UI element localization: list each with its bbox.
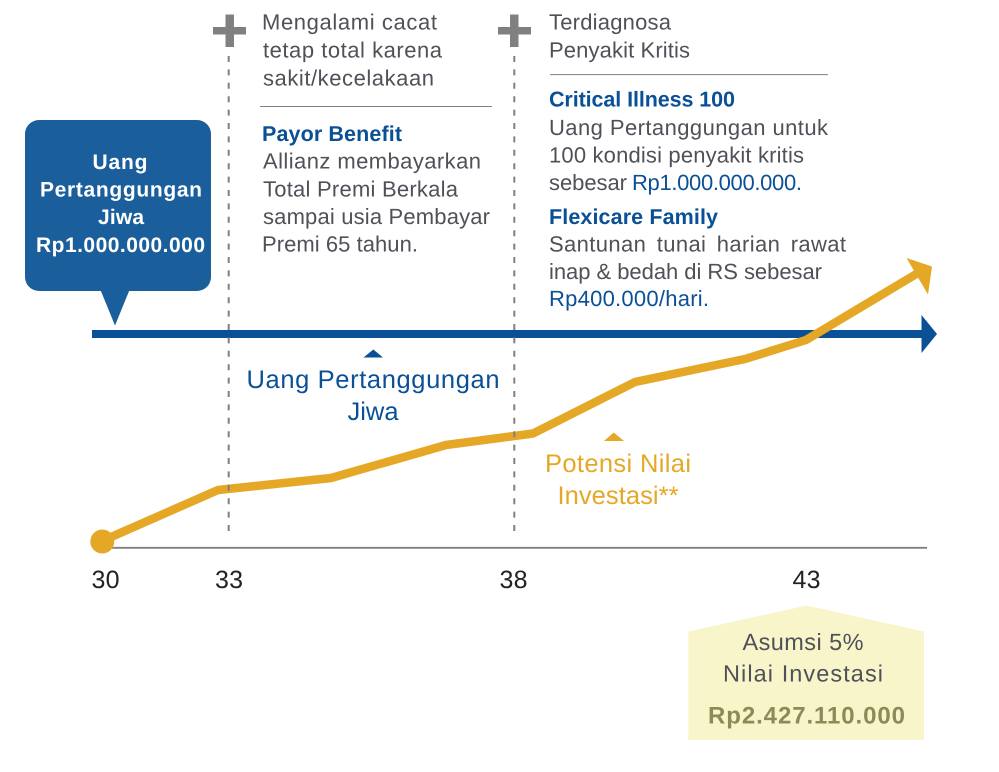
callout: sum assured bubble: Rp1.000.000.000 (36, 234, 205, 257)
callout: sum assured bubble (25, 120, 211, 326)
critical illness text: Critical Illness 100 (549, 88, 735, 112)
blue series label (246, 366, 500, 426)
critical illness text: Uang Pertanggungan untuk (549, 115, 829, 140)
small gold pointer (604, 432, 624, 441)
divider left (260, 106, 492, 108)
payor benefit text (262, 122, 490, 256)
dashed marker lines (229, 56, 514, 533)
callout: sum assured bubble: Jiwa (98, 206, 144, 229)
left event text: sakit/kecelakaan (263, 66, 434, 90)
divider right (550, 74, 828, 76)
callout: sum assured bubble: Pertanggungan (40, 178, 202, 202)
payor benefit text: Total Premi Berkala (263, 176, 459, 202)
callout: yellow house: Nilai Investasi (723, 660, 883, 686)
critical illness text: Rp1.000.000.000. (632, 170, 802, 195)
callout: yellow house: Rp2.427.110.000 (708, 702, 905, 730)
payor benefit text: Allianz membayarkan (263, 148, 481, 174)
age labels (92, 566, 820, 594)
age labels: 33 (215, 566, 243, 594)
blue series label: Jiwa (348, 398, 399, 426)
payor benefit text: Premi 65 tahun. (262, 232, 418, 256)
flexicare text: inap & bedah di RS sebesar (549, 259, 822, 284)
critical illness text: 100 kondisi penyakit kritis (549, 142, 804, 168)
callout: yellow house: Asumsi 5% (742, 629, 864, 655)
blue series label: Uang Pertanggungan (246, 366, 500, 394)
blue arrow: sum assured (92, 315, 937, 353)
axis line (100, 547, 927, 549)
left event text: Mengalami cacat (262, 10, 437, 34)
right event text: Penyakit Kritis (549, 38, 690, 62)
flexicare text: Santunan tunai harian rawat (549, 232, 846, 256)
age labels: 43 (792, 566, 820, 594)
left event text (262, 10, 443, 90)
left event text: tetap total karena (263, 38, 443, 62)
critical illness text (549, 88, 829, 195)
flexicare text: Rp400.000/hari. (549, 286, 709, 311)
payor benefit text: Payor Benefit (262, 122, 402, 146)
age labels: 38 (500, 566, 528, 594)
right event text: Terdiagnosa (549, 10, 672, 34)
callout: yellow house (688, 606, 924, 740)
gold series label: Potensi Nilai (545, 450, 691, 478)
critical illness text: sebesar (549, 170, 627, 195)
gold series label: Investasi** (558, 482, 679, 510)
small blue pointer (364, 350, 383, 358)
gold series label (545, 450, 691, 510)
gold arrow: investment value (90, 258, 932, 554)
age labels: 30 (92, 566, 120, 594)
right event text (549, 10, 690, 62)
flexicare text: Flexicare Family (549, 205, 718, 229)
icon: plus left (213, 14, 246, 47)
flexicare text (549, 205, 846, 311)
payor benefit text: sampai usia Pembayar (263, 204, 490, 229)
icon: plus right (498, 14, 531, 47)
callout: sum assured bubble: Uang (92, 151, 148, 174)
